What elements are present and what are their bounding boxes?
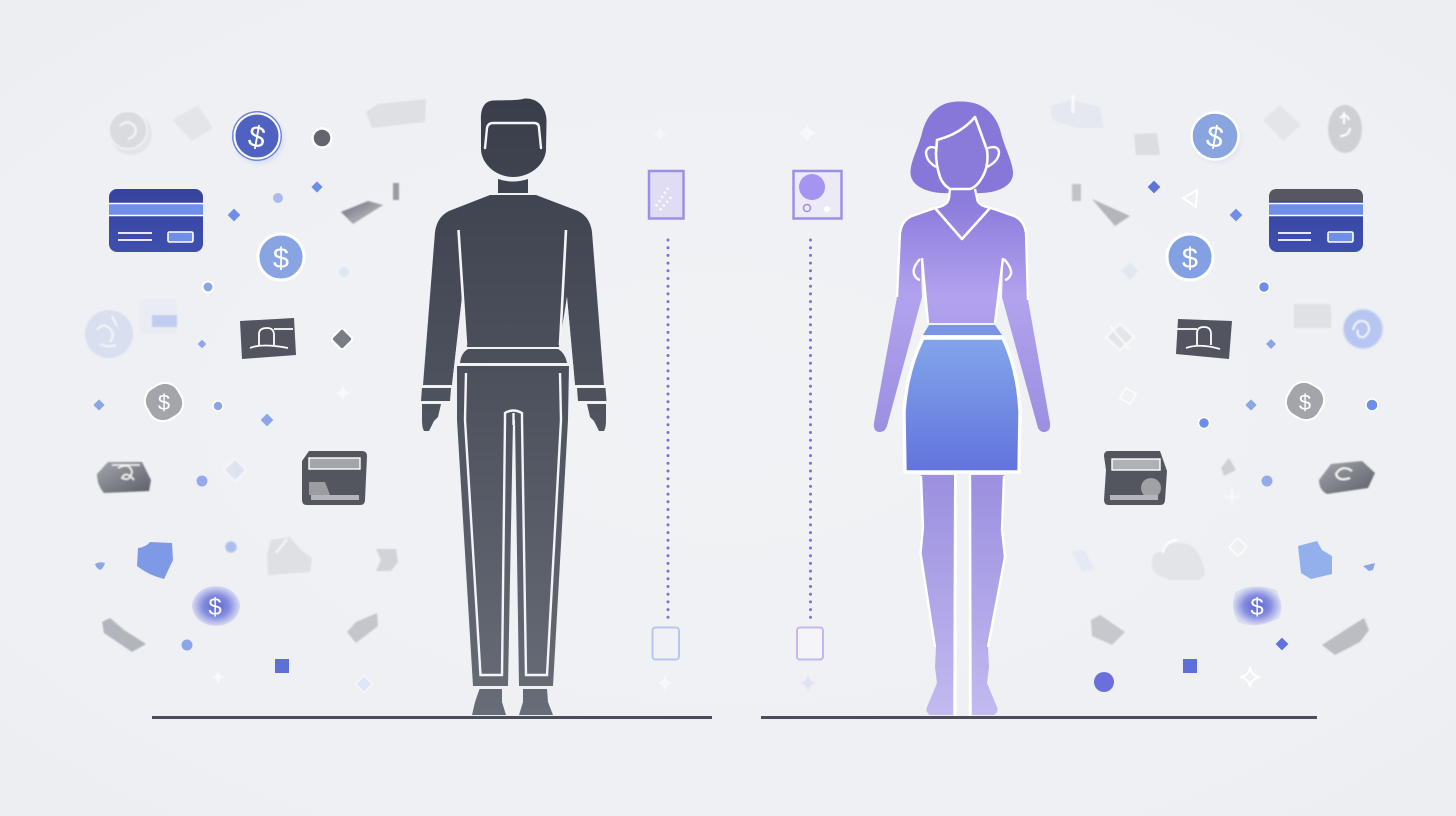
woman hair [910, 101, 1013, 193]
icon: pale blue dot [226, 542, 236, 552]
icon: blue dollar coin: $ [246, 120, 268, 155]
woman neckline [935, 208, 990, 239]
icon: sparkles [211, 670, 372, 692]
icon: white outline diamond [1229, 538, 1247, 556]
icon: small diamonds [1148, 181, 1276, 349]
icon: pale blue coin [1343, 309, 1383, 349]
man hands [422, 404, 606, 431]
man torso and arms [423, 195, 604, 385]
icon: faded blue coin [85, 310, 133, 358]
icon: light blue coin: $ [273, 243, 289, 275]
icon: blue blob card [1298, 541, 1332, 579]
icon: grey clapper [267, 537, 312, 575]
icon: dark ID card [240, 318, 296, 359]
woman shoulder outline [897, 189, 1028, 300]
icon: faded note with blue band [139, 299, 177, 334]
icon: faint diamond [224, 459, 246, 481]
icon: indigo square [1183, 659, 1197, 673]
icon: faded grey block [1134, 133, 1160, 155]
icon: purple coin: $ [1250, 594, 1264, 621]
icon: faded ticket [366, 99, 426, 128]
woman face outline [936, 117, 988, 189]
icon: credit card right [1269, 189, 1363, 252]
icon: blue dollar coin [1192, 112, 1241, 163]
icon: faint sheet [1072, 550, 1095, 572]
icon: faint marks [1221, 458, 1240, 505]
marker: man bottom box [652, 628, 679, 660]
figure: woman silhouette [874, 101, 1050, 716]
icon: grey shard [1322, 618, 1369, 655]
icon: purple coin: $ [208, 594, 222, 621]
icon: grey pill coin: $ [1299, 390, 1311, 415]
icon: indigo circle [1094, 672, 1114, 692]
right money icons [1050, 95, 1383, 692]
man trousers [457, 366, 569, 686]
icon: grey S shape [376, 549, 398, 571]
icon: grey cloud [1152, 540, 1205, 580]
icon: grey pill coin [1280, 376, 1330, 426]
woman torso edge lines [922, 258, 1003, 323]
icon: indigo diamond [1276, 638, 1288, 650]
marker: woman top card [794, 171, 842, 218]
icon: blue blob card [137, 542, 173, 579]
icon: pale grey shard [1091, 615, 1125, 645]
icon: grey pill coin: $ [158, 390, 170, 415]
marker: man top card [649, 171, 684, 218]
marker: woman bottom box [797, 628, 823, 660]
icon: grey pill coin [139, 377, 189, 427]
icon: grey rock coin [97, 462, 151, 493]
man neck [498, 179, 528, 193]
icon: light blue coin [258, 234, 304, 280]
icon: light blue coin [1167, 234, 1213, 280]
icon: blue dot [1258, 282, 1270, 292]
icon: faded ticket [1050, 95, 1104, 128]
icon: grey coin [1328, 105, 1362, 153]
icon: faded grey note [1294, 304, 1331, 328]
icon: blue dots row [1198, 399, 1378, 571]
icon: purple coin [192, 586, 240, 626]
sparkles: centre column [652, 123, 817, 692]
icon: credit card left [109, 189, 203, 252]
icon: faint sparkle [334, 384, 352, 402]
icon: dark shard [341, 183, 399, 224]
icon: dark wallet [302, 451, 367, 505]
dotted line: man height [666, 240, 670, 622]
woman skirt [904, 338, 1020, 472]
woman underarm marks [914, 259, 1011, 280]
icon: pale grey shard [347, 613, 378, 643]
icon: sparkle outline [1240, 667, 1260, 687]
icon: faded grey note [1263, 105, 1301, 141]
icon: faint diamond [336, 264, 352, 280]
icon: blue dot [202, 282, 214, 292]
figure: man silhouette [421, 98, 606, 715]
icon: blue dollar coin [232, 111, 284, 164]
icon: dark wallet [1104, 451, 1167, 505]
icon: faint cross [1106, 324, 1134, 350]
icon: small blue marks row [93, 399, 273, 650]
icon: faded grey coin [109, 111, 152, 155]
icon: faint mark [1122, 263, 1138, 279]
icon: grey shard [1072, 184, 1130, 226]
icon: small diamonds [198, 181, 323, 348]
dotted line: woman height [809, 240, 812, 622]
woman ears [926, 147, 999, 167]
woman waistband [923, 325, 1002, 335]
left money icons [85, 99, 426, 692]
icon: white triangle outline [1183, 190, 1197, 207]
icon: grey rock coin [1319, 461, 1375, 494]
icon: faint outline diamond [1120, 388, 1136, 404]
icon: blue square [275, 659, 289, 673]
woman body and arms [874, 189, 1050, 432]
man feet [472, 689, 553, 715]
man cuffs [421, 388, 606, 401]
icon: blue dollar coin: $ [1204, 120, 1226, 155]
woman legs [921, 475, 954, 715]
icon: grey diamond [331, 328, 353, 350]
man head [481, 98, 547, 177]
ground line: left [152, 716, 712, 719]
icon: dark ID card [1176, 319, 1232, 359]
ground line: right [761, 716, 1317, 719]
icon: light blue coin: $ [1182, 243, 1198, 275]
icon: grey shard [102, 618, 146, 652]
icon: faded grey note [172, 105, 213, 141]
icon: purple coin [1233, 586, 1281, 625]
man belt [460, 349, 567, 363]
icon: grey dot [312, 128, 332, 148]
